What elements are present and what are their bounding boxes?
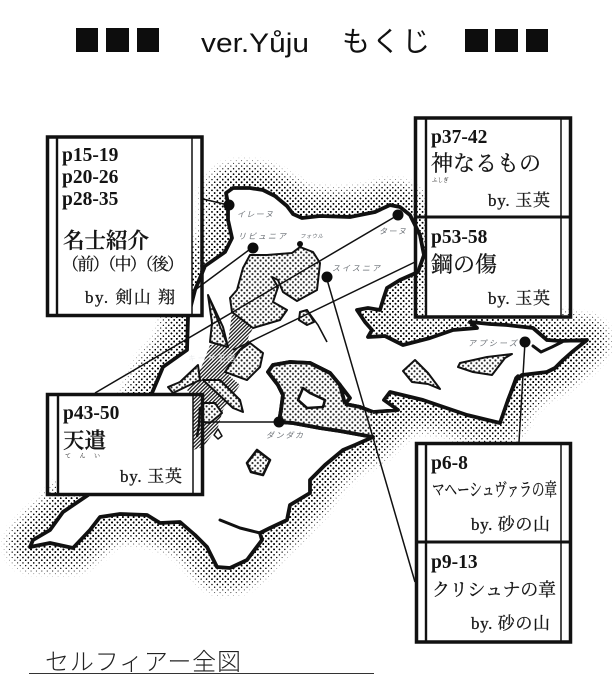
heading: 天遣 — [63, 429, 106, 453]
page numbers — [62, 145, 119, 210]
page numbers: p20-26 — [62, 167, 119, 188]
inland sea — [268, 362, 373, 437]
heading: クリシュナの章 — [432, 580, 556, 600]
lake island — [298, 388, 325, 408]
subheading: （前）（中）（後） — [62, 255, 184, 274]
label Kisa kingdom: キーサ王国 — [188, 354, 235, 363]
author: by. 玉英 — [488, 289, 550, 308]
spur lines — [208, 295, 327, 347]
map of Selfia — [1, 155, 612, 598]
inland dotted regions — [168, 247, 512, 475]
page numbers: p37-42 — [431, 127, 487, 148]
panel: p15-35 — [48, 137, 202, 316]
title squares left — [76, 28, 159, 52]
page numbers: p53-58 — [431, 227, 488, 248]
ruby: ふしぎ — [432, 176, 449, 184]
label Ilerna: イレーヌ — [237, 210, 273, 219]
author: by. 玉英 — [120, 467, 182, 486]
title text: ver.Yůju — [201, 28, 309, 58]
author: by. 剣山 翔 — [85, 288, 175, 307]
heading: 神なるもの — [431, 151, 541, 176]
author: by. 砂の山 — [471, 614, 550, 633]
label Apsizes: アプシーズ — [468, 339, 519, 348]
page numbers: p15-19 — [62, 145, 119, 166]
title squares right — [465, 29, 548, 52]
label Dandaka: ダンダカ — [266, 431, 303, 440]
label Fowal: フォウル — [300, 233, 323, 240]
page numbers: p43-50 — [63, 403, 119, 424]
heading: 名士紹介 — [63, 229, 150, 253]
panel: p6-8 and p9-13 — [415, 443, 571, 643]
page numbers: p9-13 — [431, 552, 478, 573]
sea halftone — [1, 155, 612, 598]
page numbers: p28-35 — [62, 189, 119, 210]
title — [76, 26, 548, 58]
hatched kingdom — [186, 313, 253, 450]
title text kana: もくじ — [342, 26, 430, 57]
land — [30, 188, 587, 568]
leader lines — [95, 199, 525, 582]
map labels — [188, 210, 519, 440]
heading: マヘーシュヴァラの章 — [432, 480, 557, 500]
author: by. 砂の山 — [471, 515, 550, 534]
page numbers: p6-8 — [431, 453, 468, 474]
ruby: てんい — [65, 453, 100, 460]
label Libyunia: リビュニア — [238, 232, 287, 241]
author: by. 玉英 — [488, 191, 550, 210]
west coast in box strip — [197, 407, 200, 437]
panel: p43-50 — [48, 394, 202, 495]
label Suisunia: スイスニア — [332, 264, 381, 273]
map caption: セルフィアー全図 — [45, 649, 241, 676]
heading: 鋼の傷 — [431, 252, 497, 277]
label Tarn: ターヌ — [379, 227, 406, 236]
inlets and coast details — [220, 342, 562, 533]
panel: p37-42 and p53-58 — [415, 118, 571, 318]
location dots — [224, 200, 530, 428]
